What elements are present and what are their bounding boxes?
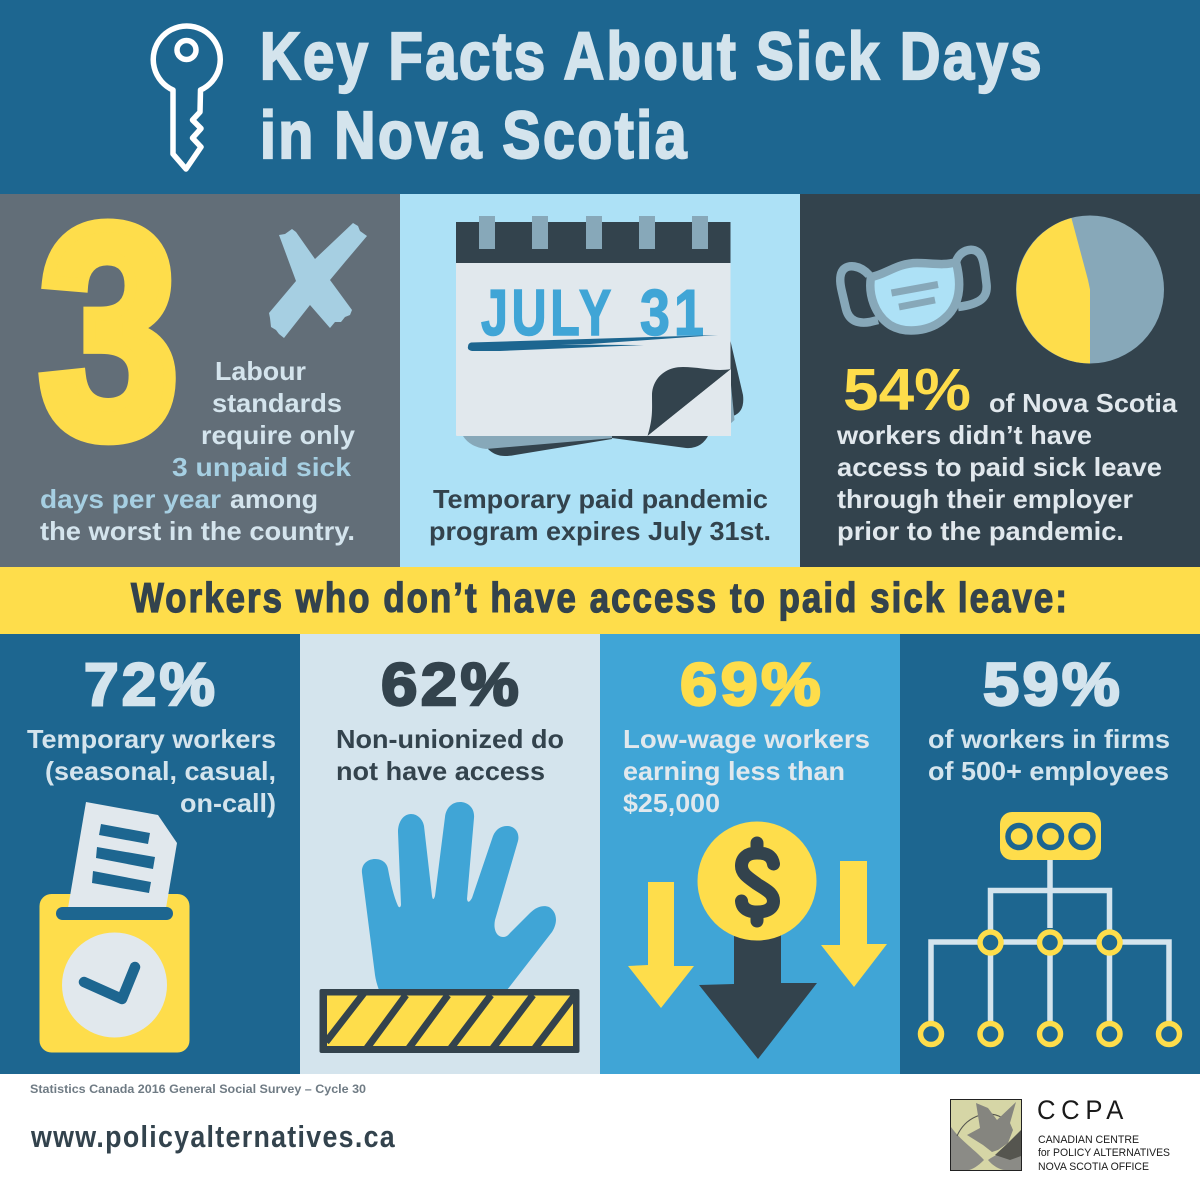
text: low-wage: earning less than xyxy=(623,756,845,786)
text: temporary workers xyxy=(27,724,276,818)
icon: falling dollar xyxy=(628,822,887,1059)
text: workers without paid leave xyxy=(836,388,1178,546)
organization name: NOVA SCOTIA OFFICE xyxy=(1038,1161,1149,1173)
title: in Nova Scotia xyxy=(260,98,689,173)
title: Key Facts About Sick Days xyxy=(260,19,1044,94)
panel: three unpaid sick days xyxy=(0,163,400,567)
panel: low-wage workers xyxy=(600,634,900,1074)
text: labour standards: standards xyxy=(212,388,342,418)
big number 3: 3 xyxy=(39,163,179,499)
text: firms: of workers in firms xyxy=(928,724,1170,754)
icon: hazard barrier xyxy=(320,989,580,1053)
text: labour standards: the worst in the country. xyxy=(40,516,355,546)
text: labour standards: days per year xyxy=(40,484,221,514)
logo mark: maple leaf xyxy=(950,1100,1022,1170)
panel: large firms xyxy=(900,634,1200,1074)
website url: www.policyalternatives.ca xyxy=(30,1119,396,1154)
icon: calendar xyxy=(456,216,743,456)
date text: JULY xyxy=(481,276,615,349)
icon: time card box xyxy=(40,802,190,1052)
text: non-unionized: not have access xyxy=(336,756,545,786)
text: firms: of 500+ employees xyxy=(928,756,1169,786)
text: labour standards: require only xyxy=(201,420,356,450)
header banner xyxy=(0,0,1200,194)
logo: CCPA xyxy=(950,1095,1170,1173)
stat: 69%: 69% xyxy=(680,651,824,718)
section heading band xyxy=(0,567,1200,634)
text: workers without paid leave: access to paid sick leave xyxy=(837,452,1162,482)
text: pandemic program xyxy=(429,484,771,546)
text: low-wage xyxy=(623,724,870,818)
icon: org chart xyxy=(920,812,1180,1044)
text: workers without paid leave: prior to the pandemic. xyxy=(837,516,1124,546)
text: low-wage: Low-wage workers xyxy=(623,724,870,754)
stat: 54%: 54% xyxy=(843,357,971,423)
icon: key xyxy=(153,26,220,169)
text: labour standards xyxy=(40,356,356,546)
text: workers without paid leave: through their employer xyxy=(837,484,1133,514)
text: pandemic program: Temporary paid pandemic xyxy=(433,484,768,514)
organization name: CANADIAN CENTRE xyxy=(1038,1134,1139,1146)
text: temporary workers: Temporary workers xyxy=(27,724,276,754)
title xyxy=(260,19,1044,173)
text: labour standards: 3 unpaid sick xyxy=(172,452,352,482)
text: pandemic program: program expires July 31st. xyxy=(429,516,771,546)
text: temporary workers: on-call) xyxy=(180,788,276,818)
panel: 54 percent xyxy=(800,194,1200,567)
text: workers without paid leave: of Nova Scotia xyxy=(989,388,1178,418)
text: firms xyxy=(928,724,1170,786)
underline stroke xyxy=(468,335,718,351)
organization name xyxy=(1037,1095,1170,1173)
text: labour standards: Labour xyxy=(215,356,306,386)
page curl xyxy=(648,367,731,436)
stat: 59%: 59% xyxy=(983,651,1123,718)
source note: Statistics Canada 2016 General Social Survey – Cycle 30 xyxy=(30,1084,366,1096)
date text: 31 xyxy=(640,276,708,349)
panel: July 31 expiry xyxy=(400,194,800,567)
icon: tape X xyxy=(269,223,367,338)
icon: raised hand xyxy=(362,802,556,990)
icon: face mask xyxy=(840,250,987,330)
stat: 72%: 72% xyxy=(84,651,218,718)
text: non-unionized: Non-unionized do xyxy=(336,724,564,754)
text: workers without paid leave: workers didn’t have xyxy=(836,420,1092,450)
text: non-unionized xyxy=(336,724,564,786)
pie chart xyxy=(1016,216,1164,364)
stat: 62%: 62% xyxy=(381,651,522,718)
panel: non-unionized xyxy=(300,634,600,1074)
text: low-wage: $25,000 xyxy=(623,788,720,818)
text: temporary workers: (seasonal, casual, xyxy=(45,756,276,786)
organization name: for POLICY ALTERNATIVES xyxy=(1038,1147,1170,1159)
panel: temporary workers xyxy=(0,634,300,1074)
organization name: CCPA xyxy=(1037,1095,1129,1125)
text: labour standards: among xyxy=(230,484,318,514)
